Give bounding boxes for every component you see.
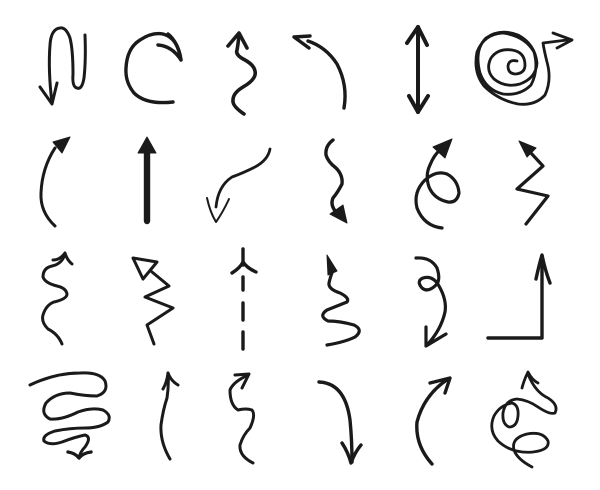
arrow: gently curved up (161, 373, 178, 459)
arrow: loop with solid head (416, 139, 459, 228)
arrow: tangled loops up (492, 372, 556, 467)
arrow: circular clockwise (126, 34, 181, 103)
arrow: right-angle up (488, 255, 550, 338)
arrow: small loop then down-left (416, 258, 446, 346)
arrow: thick straight up (138, 137, 156, 221)
arrow: wavy up-right (230, 374, 254, 463)
arrow: U-turn squiggle down (40, 28, 85, 104)
arrow: double-headed vertical (407, 27, 428, 112)
arrow: long horizontal squiggle down (30, 373, 109, 458)
arrow: dashed up (232, 249, 256, 349)
arrow: wavy up with small head (43, 253, 72, 344)
arrow: spiral (476, 32, 572, 104)
arrow: curved down (319, 382, 361, 463)
arrow: wavy up (228, 33, 255, 114)
arrow: zigzag with outlined triangle head (133, 258, 173, 344)
arrow: squiggle up with solid head (323, 255, 359, 345)
arrow: curved up-right with solid head (41, 137, 70, 226)
arrow: zigzag with solid head (517, 141, 548, 224)
arrow: wavy down with solid head (326, 140, 347, 223)
arrow: swoosh down-left with open head (207, 149, 270, 222)
arrow: curved up-left (294, 36, 345, 108)
arrow: curved up-right (417, 378, 450, 464)
